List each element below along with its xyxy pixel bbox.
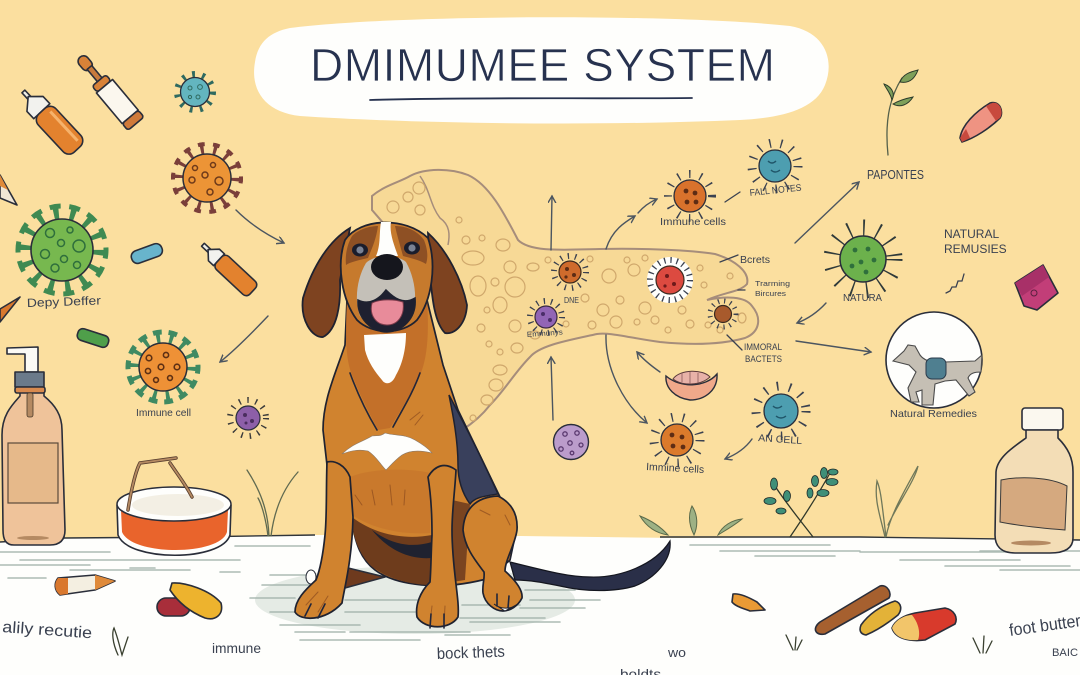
- icon: lips: [666, 371, 717, 400]
- labels: tissue parts: Bircures: [755, 289, 786, 298]
- cell: orange in tissue: [554, 256, 586, 288]
- illustration: dog: [295, 222, 670, 628]
- icon: pump bottle: [2, 347, 65, 545]
- icon: wooden log: [815, 586, 890, 634]
- icon: plant left: [247, 470, 298, 536]
- icon: grass right: [876, 466, 918, 537]
- tissue label: DNE: [564, 296, 579, 305]
- arrow: [236, 210, 284, 243]
- dog: left eye: [352, 244, 368, 256]
- dog: paw toes: [305, 594, 509, 628]
- dog: neck shading: [346, 300, 428, 430]
- tissue label: Emmunys: [527, 327, 563, 339]
- dog: tail: [510, 541, 670, 590]
- arrow: [725, 192, 740, 202]
- dog: right ear: [428, 233, 467, 333]
- dog: nose: [371, 254, 403, 280]
- icon: crayon left: [0, 175, 17, 205]
- dog: chest white patch: [342, 433, 432, 470]
- label: natural remusies: REMUSIES: [944, 242, 1007, 256]
- dog: far paw: [306, 570, 316, 584]
- dog: hind toe: [494, 604, 518, 611]
- icon: pink cube: [1015, 265, 1058, 310]
- dog: left ear: [303, 228, 350, 337]
- cell: green virus: [18, 206, 106, 294]
- panel: tissue diagram: [372, 170, 758, 430]
- labels: tissue parts: IMMORAL: [744, 342, 782, 353]
- dog: lower belly shade: [352, 517, 432, 585]
- arrow: [638, 199, 657, 213]
- floor: [0, 535, 1080, 675]
- icon: grass tuft: [113, 628, 128, 655]
- text: wo: wo: [667, 645, 686, 660]
- dog: right eye: [404, 242, 420, 254]
- dog: front right leg: [417, 466, 458, 627]
- icon: grass tuft: [973, 636, 992, 653]
- label: immune cell: Immune cell: [136, 407, 191, 419]
- dog: rear flank: [452, 500, 470, 582]
- cell: red in tissue: [647, 257, 693, 303]
- label: paponres: PAPONTES: [867, 168, 924, 182]
- labels: tissue parts: [740, 254, 790, 365]
- text: baic: BAIC: [1052, 647, 1078, 659]
- icon: round dog medallion: [886, 312, 982, 408]
- arrow: [551, 357, 553, 420]
- cell: green natura: [832, 228, 894, 290]
- arrow: [796, 341, 871, 352]
- cell: orange upper left: [173, 144, 241, 212]
- icon: capsules: [157, 583, 222, 619]
- text: immune: immune: [212, 640, 261, 656]
- arrow: [220, 316, 268, 362]
- cell: teal top left: [177, 74, 213, 110]
- icon: green pill: [76, 327, 110, 349]
- dog: head darker patches: [346, 226, 427, 265]
- label: virus: Depy Deffer: [27, 293, 101, 310]
- arrow: [725, 439, 752, 459]
- icon: orange crayon: [732, 594, 765, 611]
- dog: forehead blaze: [376, 222, 398, 256]
- text: bock thets: bock thets: [437, 644, 505, 663]
- cell: purple in tissue: [530, 301, 562, 333]
- label: natura: NATURA: [843, 292, 882, 304]
- cell: orange immune cells top: [668, 174, 712, 218]
- dog: back and body: [323, 300, 517, 586]
- dog: fur lines: [306, 412, 510, 624]
- dog: belly: [350, 470, 430, 533]
- dog: neck white ruff: [364, 333, 406, 383]
- label: immune cells: Immune cells: [660, 216, 726, 228]
- icon: brush: [72, 50, 144, 130]
- labels: tissue parts: Bcrets: [740, 254, 770, 266]
- arrow: [606, 335, 647, 423]
- labels: tissue parts: Trarming: [755, 279, 790, 288]
- cell: orange immune cells bottom: [654, 417, 700, 463]
- squiggle: [946, 274, 964, 293]
- cell: teal bottom: [756, 386, 806, 436]
- arrow: [606, 216, 635, 249]
- icon: pencil left: [0, 297, 20, 322]
- dog: neck lines: [350, 373, 420, 430]
- icon: sprig top right: [884, 70, 918, 155]
- dog: far hind foot: [325, 566, 385, 588]
- text: alily recutie: alily recutie: [2, 619, 93, 642]
- icon: grass tuft: [786, 635, 802, 650]
- arrow: [551, 196, 552, 250]
- dog: mouth: [358, 290, 415, 332]
- label: natural remedies: Natural Remedies: [890, 408, 977, 420]
- cell: brown in tissue: [710, 301, 736, 327]
- dog: head: [341, 222, 432, 331]
- dog: dark saddle: [449, 395, 498, 504]
- icon: tube top left: [15, 83, 86, 157]
- arrow: [795, 182, 859, 243]
- dog: dark belly stripe: [372, 530, 432, 558]
- title banner: [254, 17, 829, 123]
- icon: teal pill: [130, 242, 164, 265]
- title: DMIMUMEE SYSTEM: [310, 39, 775, 91]
- icon: sprig right: [764, 468, 838, 537]
- dog: muzzle: [357, 256, 415, 328]
- label: fall notes: FALL NOTES: [749, 183, 802, 199]
- arrow: [797, 303, 826, 323]
- icon: jar bottle right: [995, 408, 1073, 553]
- arrow: [637, 352, 660, 372]
- dog: tongue: [371, 300, 403, 325]
- labels: tissue parts: BACTETS: [745, 354, 782, 365]
- dog shadow: [250, 566, 600, 640]
- cell: teal top: [752, 143, 798, 189]
- icon: grass centre: [640, 506, 742, 535]
- label: natural remusies: NATURAL: [944, 227, 999, 241]
- icon: yellow tube: [860, 601, 901, 635]
- leader lines: [720, 255, 745, 350]
- cell: purple sphere: [554, 424, 588, 460]
- dog: hind leg: [463, 496, 522, 611]
- icon: red tube: [892, 608, 956, 640]
- icon: food bowl: [117, 458, 231, 555]
- label: an cell: AN CELL: [758, 433, 803, 447]
- icon: tube middle: [197, 238, 259, 298]
- icon: crayon bottom left: [55, 575, 115, 595]
- icon: red cone: [960, 103, 1002, 142]
- cell: purple small: [230, 400, 266, 436]
- dog: front left leg: [295, 462, 353, 618]
- cell: orange lower left: [128, 332, 198, 402]
- label: immune cells: Immine cells: [646, 461, 704, 476]
